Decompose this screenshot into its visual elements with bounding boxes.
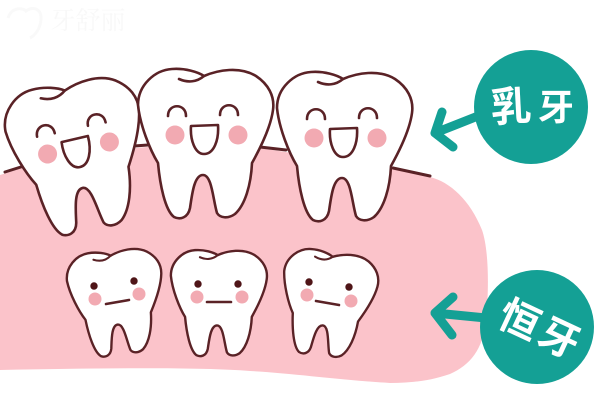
gum line: [5, 145, 430, 176]
badge: baby teeth: 牙: [538, 87, 574, 128]
badge: permanent teeth: [480, 270, 594, 384]
tooth: baby left: [0, 70, 160, 243]
arrow: permanent teeth: [435, 297, 486, 335]
arrow: baby teeth: [435, 112, 478, 147]
tooth: permanent middle: [171, 250, 267, 356]
gum: [0, 147, 488, 383]
tooth: permanent right: [274, 246, 381, 362]
badge: permanent teeth: 牙: [531, 311, 586, 368]
tooth: baby middle: [138, 69, 273, 218]
badge: baby teeth: 乳: [489, 83, 533, 131]
tooth: permanent left: [64, 245, 170, 360]
badge: permanent teeth: 恒: [492, 292, 546, 349]
tooth: baby right: [277, 72, 412, 221]
watermark logo: 牙舒丽: [50, 7, 126, 35]
badge: baby teeth: [474, 50, 588, 164]
watermark logo: [8, 7, 126, 38]
